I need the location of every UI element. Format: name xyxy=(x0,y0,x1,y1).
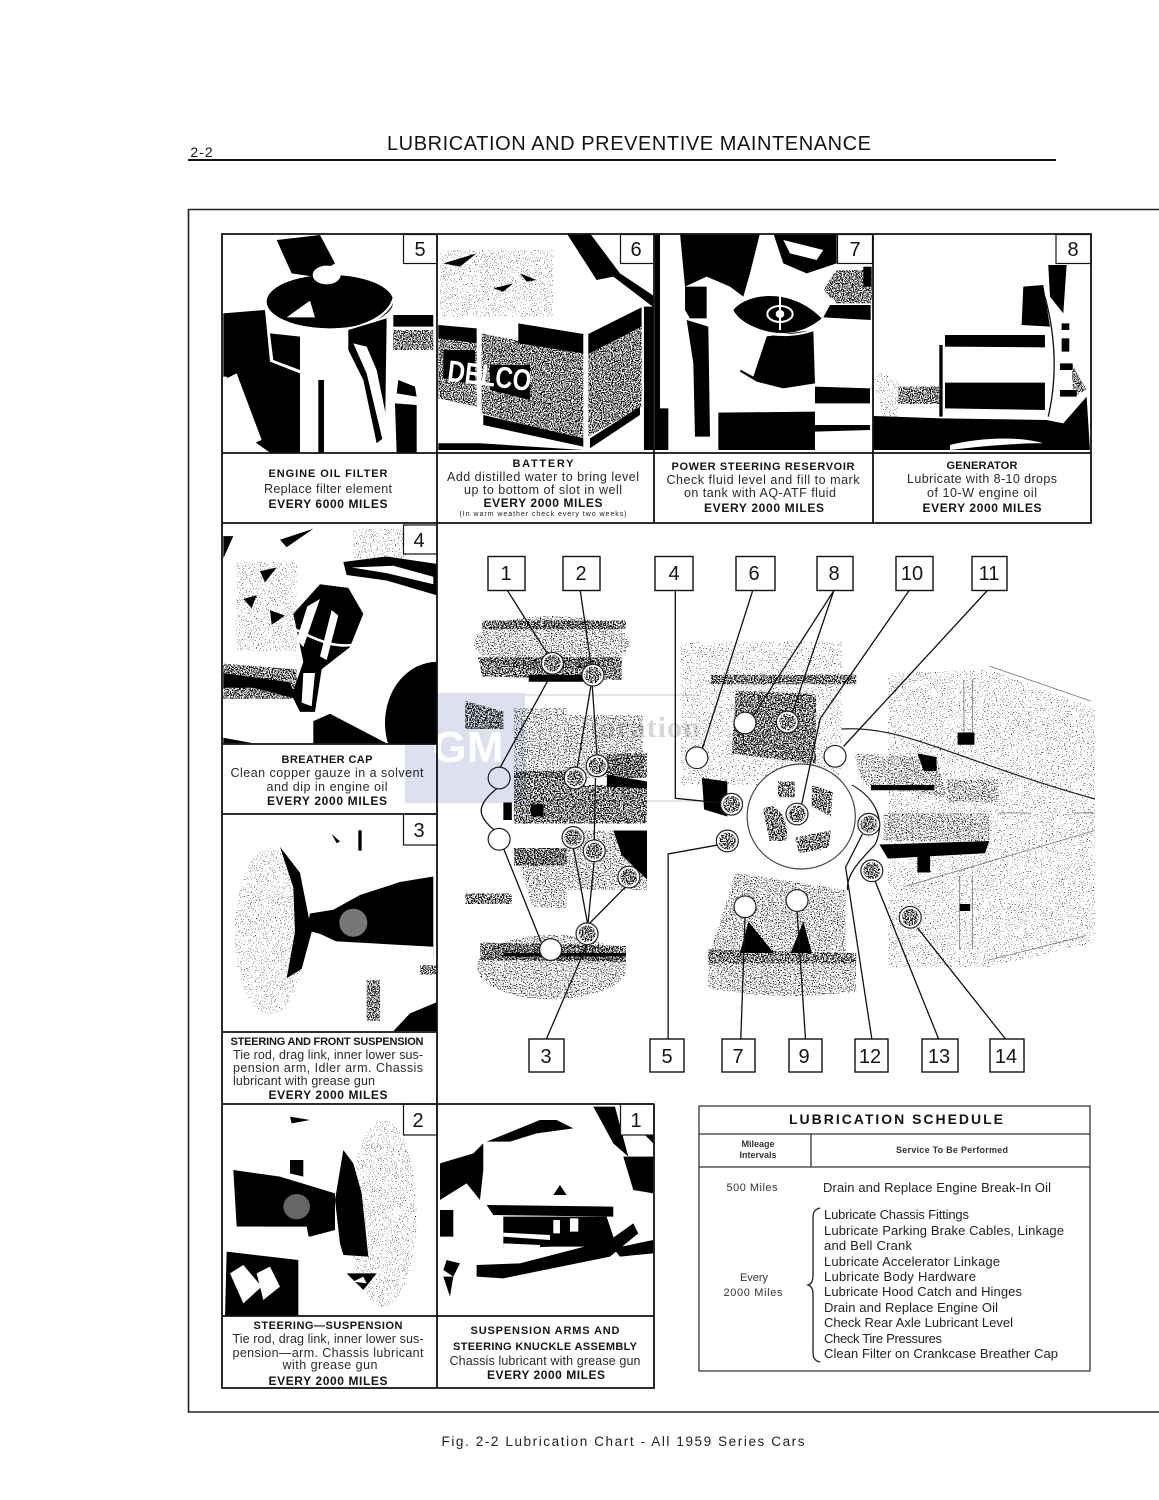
caption: SUSPENSION ARMS AND xyxy=(470,1325,620,1337)
caption: pension—arm. Chassis lubricant xyxy=(232,1346,424,1360)
2000 miles row: Lubricate Chassis Fittings xyxy=(824,1207,970,1222)
caption: STEERING—SUSPENSION xyxy=(254,1320,403,1332)
lubrication points xyxy=(488,652,921,960)
2000 miles row: Lubricate Hood Catch and Hinges xyxy=(824,1284,1022,1299)
caption: on tank with AQ-ATF fluid xyxy=(684,486,836,500)
chassis diagram: 11 xyxy=(979,563,999,585)
caption xyxy=(907,460,1057,515)
caption: Tie rod, drag link, inner lower sus- xyxy=(232,1332,424,1346)
caption: of 10-W engine oil xyxy=(927,486,1037,500)
2000 miles row: Lubricate Accelerator Linkage xyxy=(824,1254,1000,1269)
photo: generator xyxy=(873,265,1090,450)
chassis diagram: 6 xyxy=(748,563,760,585)
caption: POWER STEERING RESERVOIR xyxy=(672,461,855,473)
caption: Lubricate with 8-10 drops xyxy=(907,472,1057,486)
photo: suspension arms xyxy=(440,1105,653,1297)
chassis diagram: 1 xyxy=(500,563,512,585)
panel: generator xyxy=(873,234,1091,515)
table frame xyxy=(699,1106,1090,1371)
caption xyxy=(450,1325,641,1382)
photo: battery xyxy=(438,233,655,450)
watermark xyxy=(405,693,701,803)
caption: with grease gun xyxy=(282,1358,378,1372)
caption: STEERING AND FRONT SUSPENSION xyxy=(230,1036,424,1048)
panel: steering and front suspension xyxy=(230,814,437,1102)
number badge 8 xyxy=(1056,234,1091,264)
header rule xyxy=(188,159,1056,161)
caption: and dip in engine oil xyxy=(266,780,388,794)
panel: battery xyxy=(438,233,655,518)
number badge 3: 3 xyxy=(413,820,425,842)
number badge 1: 1 xyxy=(630,1110,642,1132)
caption: BREATHER CAP xyxy=(282,754,372,766)
figure caption: Fig. 2-2 Lubrication Chart - All 1959 Series Cars xyxy=(442,1434,805,1449)
column headers: Mileage xyxy=(741,1139,775,1149)
chassis diagram: 10 xyxy=(901,563,923,585)
number badge 8: 8 xyxy=(1067,239,1079,261)
number badge 7 xyxy=(838,234,872,264)
panel: steering suspension xyxy=(225,1104,437,1388)
2000 miles row: and Bell Crank xyxy=(824,1238,912,1253)
number badge 7: 7 xyxy=(849,239,861,261)
2000 miles row: Check Tire Pressures xyxy=(824,1331,942,1346)
watermark: GM xyxy=(433,723,503,772)
500 miles row: 500 Miles xyxy=(726,1182,778,1194)
caption xyxy=(264,468,393,511)
lubrication schedule table xyxy=(699,1106,1090,1371)
caption: Clean copper gauze in a solvent xyxy=(230,766,424,780)
number badge 5 xyxy=(404,234,437,264)
caption: EVERY 2000 MILES xyxy=(268,1374,388,1388)
photo: steering suspension xyxy=(225,1117,417,1317)
number badge 4 xyxy=(404,525,437,554)
caption: Check fluid level and fill to mark xyxy=(666,473,860,487)
number badge 2: 2 xyxy=(412,1110,424,1132)
caption: Add distilled water to bring level xyxy=(447,470,639,484)
chassis diagram: 12 xyxy=(859,1046,881,1068)
caption: ENGINE OIL FILTER xyxy=(268,468,388,480)
2000 miles row: Lubricate Body Hardware xyxy=(824,1269,976,1284)
number badge 4: 4 xyxy=(413,530,425,552)
chassis diagram: 2 xyxy=(575,563,587,585)
number badge 6: 6 xyxy=(630,239,642,261)
caption xyxy=(230,754,424,808)
caption: Chassis lubricant with grease gun xyxy=(450,1354,641,1368)
page number: 2-2 xyxy=(190,144,214,160)
callout numbers xyxy=(488,556,1024,1072)
caption xyxy=(230,1036,424,1102)
leader lines xyxy=(481,591,1005,1039)
caption: EVERY 2000 MILES xyxy=(487,1368,605,1382)
lettering on battery: DELCO xyxy=(446,355,533,398)
caption: GENERATOR xyxy=(946,460,1018,472)
chassis diagram: 8 xyxy=(828,563,840,585)
number badge 5: 5 xyxy=(414,239,426,261)
2000 miles row: Every xyxy=(740,1272,769,1284)
caption xyxy=(232,1320,424,1388)
2000 miles row: Drain and Replace Engine Oil xyxy=(824,1300,998,1315)
photo: front suspension xyxy=(235,830,437,1031)
table heading: LUBRICATION SCHEDULE xyxy=(789,1111,1003,1127)
2000 miles row: 2000 Miles xyxy=(724,1287,783,1299)
2000 miles row: Check Rear Axle Lubricant Level xyxy=(824,1315,1013,1330)
photo: breather cap xyxy=(223,528,436,744)
chassis diagram: 5 xyxy=(661,1046,673,1068)
caption: EVERY 6000 MILES xyxy=(268,497,388,511)
photo: reservoir xyxy=(655,233,872,450)
caption: pension arm, Idler arm. Chassis xyxy=(233,1061,423,1075)
caption: (In warm weather check every two weeks) xyxy=(460,511,626,518)
caption: up to bottom of slot in well xyxy=(464,483,622,497)
watermark: toration xyxy=(589,711,701,744)
wheel with lug xyxy=(747,764,855,869)
chassis diagram: 13 xyxy=(928,1046,950,1068)
caption: STEERING KNUCKLE ASSEMBLY xyxy=(453,1341,638,1353)
number badge 1 xyxy=(620,1104,654,1135)
chassis diagram: 9 xyxy=(798,1046,810,1068)
number badge 3 xyxy=(404,814,437,845)
chart frame xyxy=(188,210,1159,1412)
caption: EVERY 2000 MILES xyxy=(922,501,1042,515)
caption: lubricant with grease gun xyxy=(233,1074,375,1088)
title: LUBRICATION AND PREVENTIVE MAINTENANCE xyxy=(387,133,871,155)
2000 miles row xyxy=(724,1207,1064,1362)
number badge 2 xyxy=(404,1104,437,1135)
shading inside lubrication points xyxy=(544,655,919,942)
chassis diagram: 4 xyxy=(668,563,680,585)
caption: Tie rod, drag link, inner lower sus- xyxy=(233,1048,423,1062)
chassis diagram: 7 xyxy=(732,1046,744,1068)
2000 miles row: Clean Filter on Crankcase Breather Cap xyxy=(824,1346,1058,1361)
column headers xyxy=(739,1139,1008,1160)
panel: breather cap xyxy=(223,524,438,805)
panel grid lines xyxy=(222,234,1091,1388)
caption: EVERY 2000 MILES xyxy=(484,496,602,510)
photo: oil filter canister xyxy=(223,235,433,453)
chassis diagram: 14 xyxy=(995,1046,1017,1068)
drawing: car chassis, front and rear views xyxy=(465,591,1095,1039)
column headers: Service To Be Performed xyxy=(896,1145,1008,1155)
caption: EVERY 2000 MILES xyxy=(267,794,387,808)
caption: EVERY 2000 MILES xyxy=(704,501,824,515)
2000 miles row: Lubricate Parking Brake Cables, Linkage xyxy=(824,1223,1064,1238)
chassis diagram xyxy=(465,556,1095,1072)
panel: engine oil filter xyxy=(223,234,437,511)
panel: power steering reservoir xyxy=(655,233,872,515)
column headers: Intervals xyxy=(739,1150,777,1160)
caption xyxy=(447,458,639,518)
chassis diagram: 3 xyxy=(540,1046,552,1068)
caption xyxy=(666,461,860,515)
caption: EVERY 2000 MILES xyxy=(268,1088,388,1102)
caption: BATTERY xyxy=(512,458,574,470)
500 miles row: Drain and Replace Engine Break-In Oil xyxy=(823,1180,1051,1195)
number badge 6 xyxy=(620,234,654,264)
panel: suspension arms and steering knuckle xyxy=(440,1104,654,1382)
caption: Replace filter element xyxy=(264,482,393,496)
